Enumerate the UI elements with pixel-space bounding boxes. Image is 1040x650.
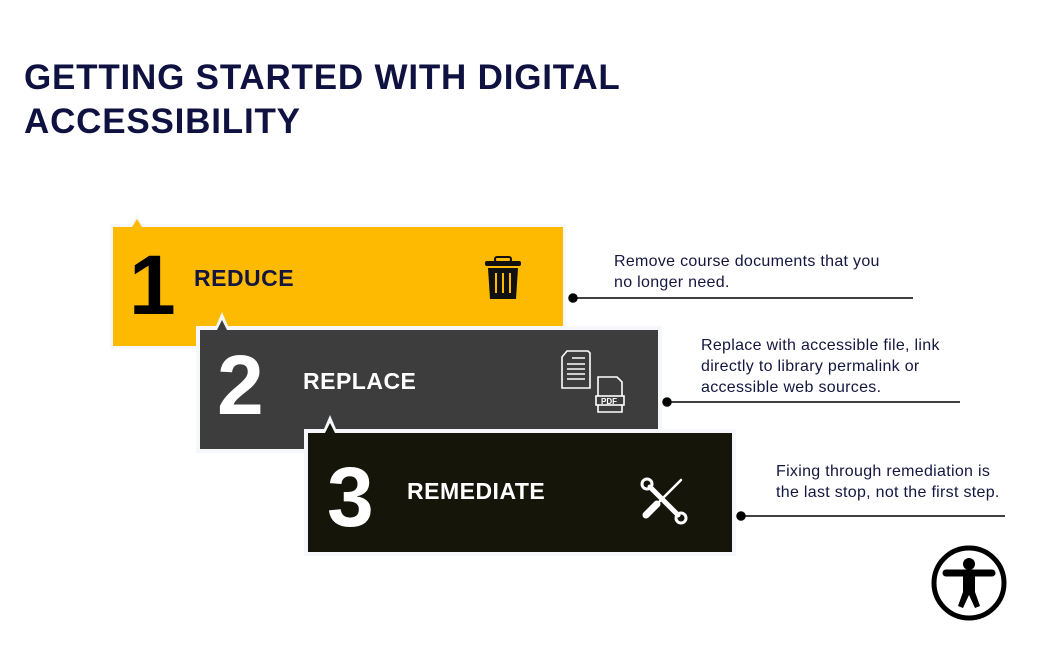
icon: tools — [642, 479, 686, 523]
text: reduce description: Remove course documents that you — [614, 253, 880, 270]
title: GETTING STARTED WITH DIGITAL — [24, 58, 621, 97]
heading: remediate: REMEDIATE — [407, 478, 545, 504]
number 2: 2 — [217, 338, 264, 432]
title — [24, 58, 621, 141]
text: reduce description — [614, 253, 880, 291]
panel: replace: PDF — [601, 397, 617, 406]
text: replace description: Replace with accessible file, link — [701, 337, 940, 354]
panel: reduce — [110, 214, 566, 349]
panel: replace — [196, 312, 662, 453]
text: replace description: directly to library permalink or — [701, 358, 920, 375]
text: remediate description: the last stop, not the first step. — [776, 484, 1000, 501]
connector lines — [569, 294, 1005, 520]
icon: documents — [562, 351, 624, 412]
text: replace description: accessible web sources. — [701, 379, 881, 396]
text: remediate description: Fixing through remediation is — [776, 463, 990, 480]
number 3: 3 — [327, 450, 374, 544]
icon: accessibility — [934, 548, 1004, 618]
heading: reduce: REDUCE — [194, 265, 294, 291]
heading: replace: REPLACE — [303, 368, 416, 394]
text: remediate description — [776, 463, 1000, 501]
number 1: 1 — [129, 238, 176, 332]
text: reduce description: no longer need. — [614, 274, 730, 291]
title: ACCESSIBILITY — [24, 102, 301, 141]
icon: trash — [485, 257, 521, 299]
text: replace description — [701, 337, 940, 396]
panel: remediate — [304, 415, 736, 556]
